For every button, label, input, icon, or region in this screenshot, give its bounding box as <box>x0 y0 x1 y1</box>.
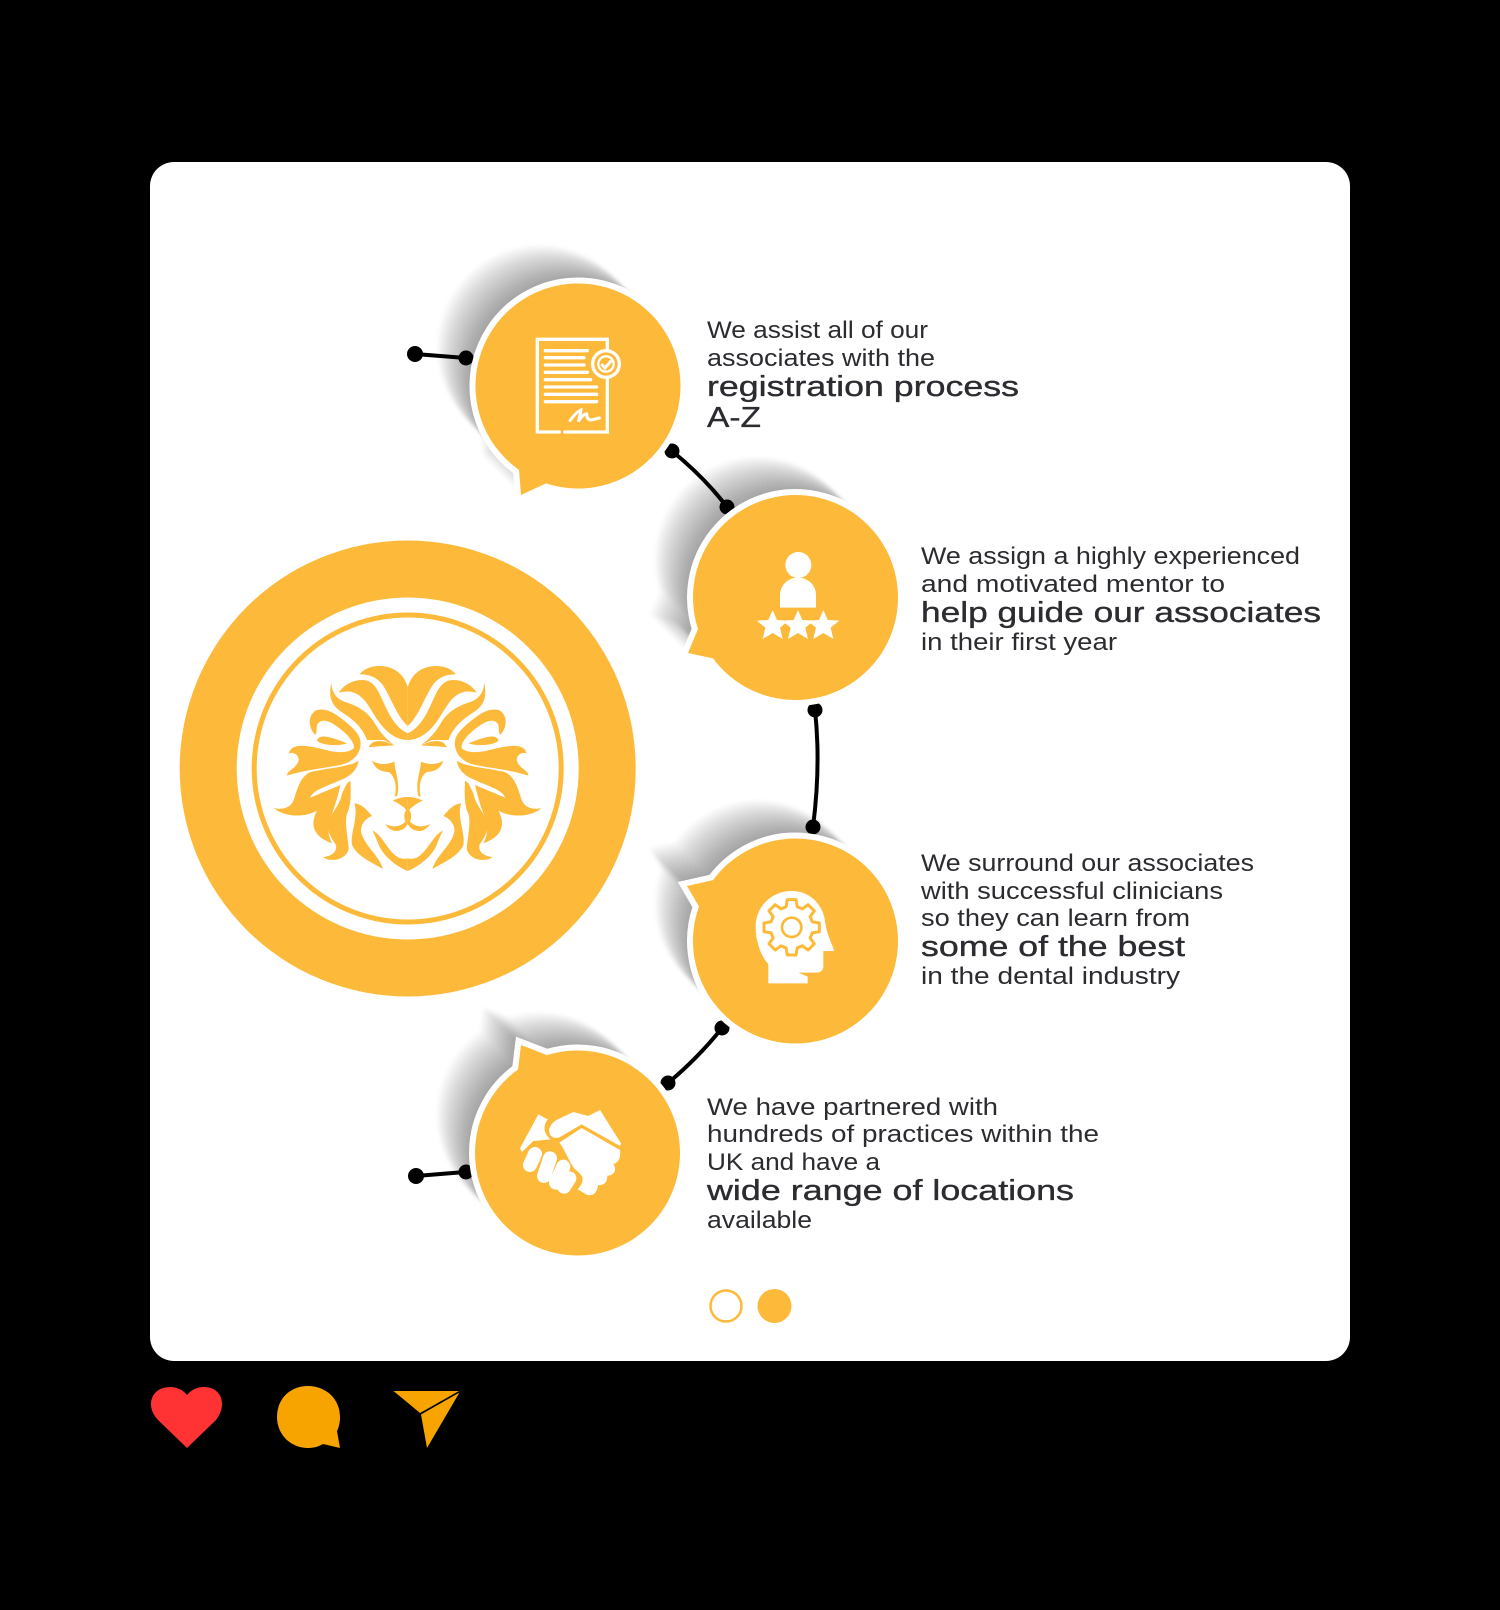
step 4 bubble: partner practices <box>475 1045 680 1255</box>
text: step 1: registration process <box>707 371 1019 403</box>
text: step 4: hundreds of practices within the <box>707 1121 1099 1148</box>
text: step 4 <box>706 1094 1099 1234</box>
text: step 3: in the dental industry <box>921 963 1181 990</box>
text: step 4: available <box>707 1207 812 1234</box>
pagination dots <box>710 1289 792 1323</box>
step 1 bubble: registration document <box>475 284 680 495</box>
text: step 4: We have partnered with <box>707 1094 998 1121</box>
icon: head with gear <box>756 891 834 983</box>
icon: person with three stars <box>757 552 839 639</box>
text: step 1: A-Z <box>707 402 761 434</box>
central lion emblem <box>180 540 636 996</box>
icon: handshake <box>520 1110 621 1195</box>
text: step 1: We assist all of our <box>707 317 928 344</box>
text: step 2: We assign a highly experienced <box>921 543 1300 570</box>
text: step 2: and motivated mentor to <box>921 571 1225 598</box>
icon: comment bubble <box>277 1386 340 1448</box>
text: step 1 <box>707 317 1019 434</box>
text: step 3 <box>920 850 1254 990</box>
icon: certificate document <box>537 339 619 432</box>
text: step 3: some of the best <box>921 931 1185 963</box>
step 3 bubble: clinicians <box>687 838 898 1043</box>
text: step 4: wide range of locations <box>706 1175 1074 1207</box>
text: step 4: UK and have a <box>707 1149 880 1176</box>
text: step 2: help guide our associates <box>921 597 1321 629</box>
connectors between bubbles <box>407 346 822 1184</box>
text: step 3: with successful clinicians <box>920 878 1223 905</box>
icon: paper plane <box>394 1391 460 1448</box>
text: step 3: We surround our associates <box>921 850 1254 877</box>
text: step 1: associates with the <box>707 345 935 372</box>
white card panel <box>150 162 1350 1361</box>
text: step 2: in their first year <box>921 629 1117 656</box>
text: step 3: so they can learn from <box>921 905 1190 932</box>
text: step 2 <box>921 543 1321 656</box>
bubble shadows <box>437 246 896 1253</box>
icon: heart <box>151 1387 222 1448</box>
step 2 bubble: mentor <box>688 495 898 700</box>
